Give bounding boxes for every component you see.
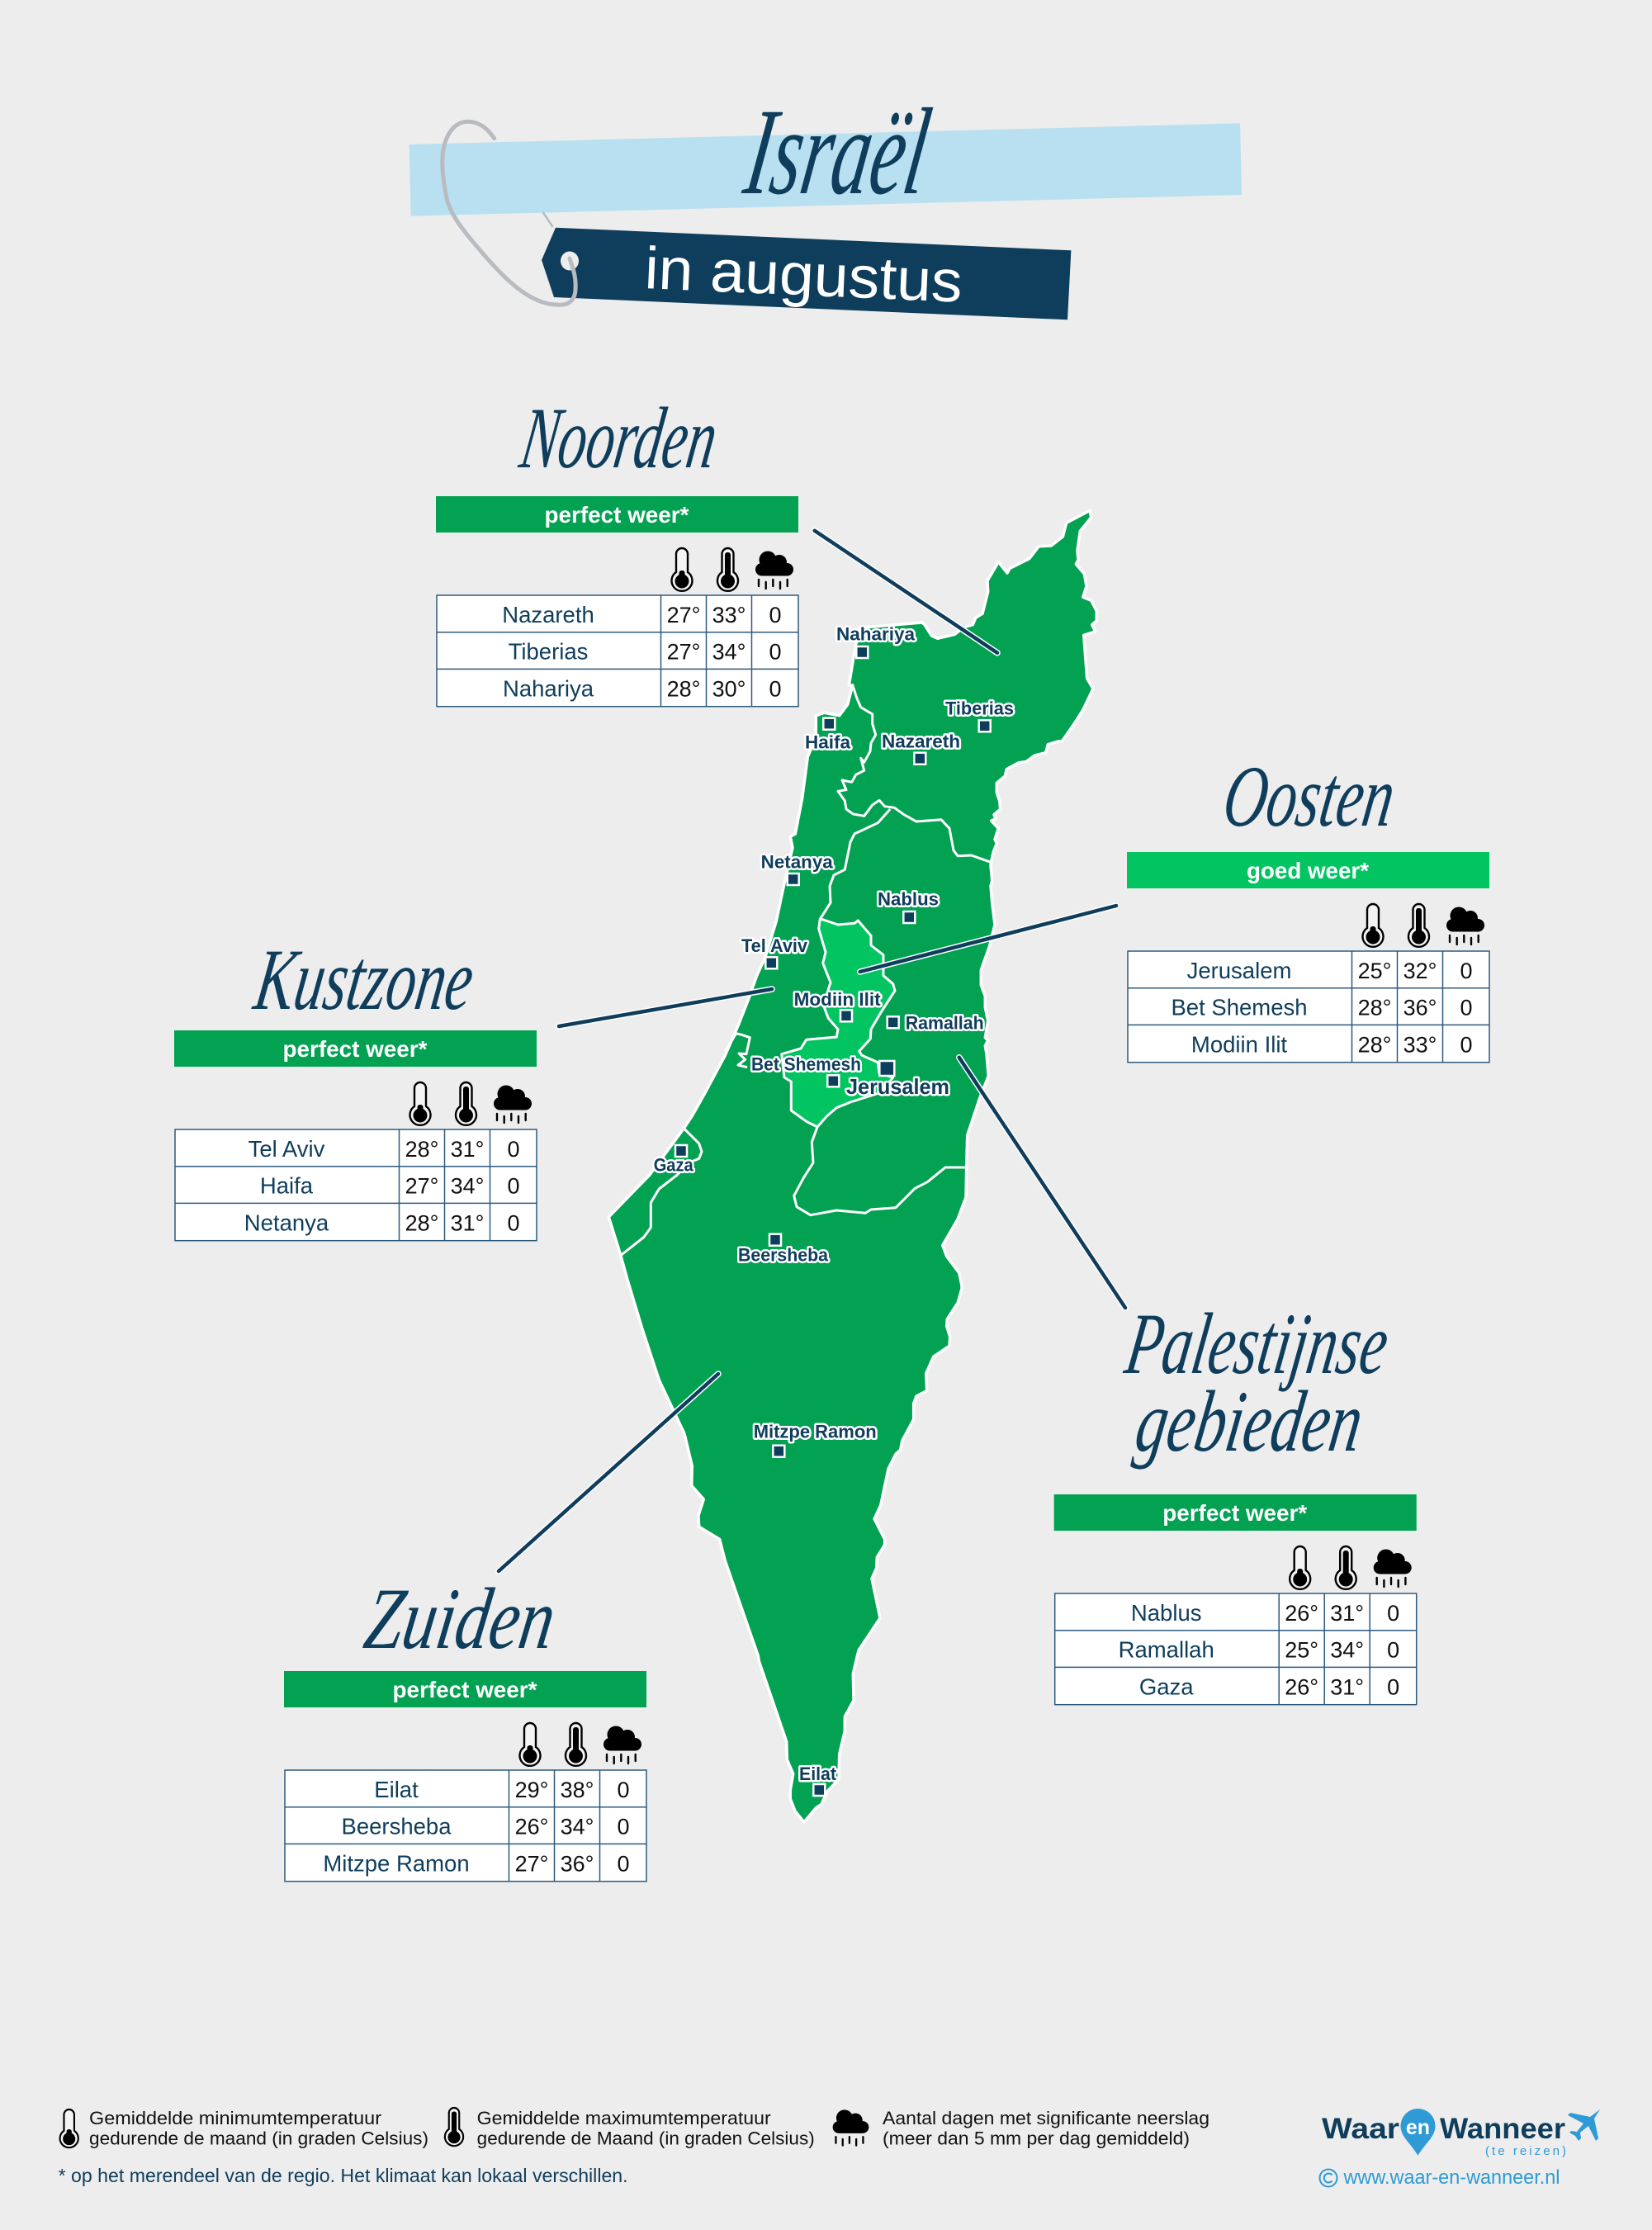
table rows: 27° — [667, 603, 700, 627]
table rows: Ramallah — [1119, 1637, 1214, 1663]
legend: maximum temperature: Gemiddelde maximumtemperatuur — [477, 2108, 771, 2128]
rating text: perfect weer* — [282, 1036, 428, 1062]
city: Nazareth — [882, 731, 960, 765]
table rows: Jerusalem — [1187, 958, 1291, 983]
table rows: 0 — [507, 1174, 520, 1199]
rating text: perfect weer* — [545, 502, 689, 528]
city: Nablus — [878, 889, 939, 923]
table rows: 28° — [1358, 1032, 1391, 1057]
logo word: Waar: Waar — [1322, 2113, 1399, 2145]
panel: zuiden — [284, 1571, 646, 1882]
city: Mitzpe Ramon: Mitzpe Ramon — [754, 1422, 877, 1442]
city: Mitzpe Ramon — [754, 1422, 877, 1457]
icon: max temperature — [566, 1723, 586, 1766]
rating bar — [1127, 852, 1489, 888]
heading: Palestijnse: Palestijnse — [1119, 1296, 1395, 1393]
legend — [60, 2108, 1209, 2149]
logo: Waar en Wanneer — [1319, 2109, 1600, 2189]
panel: noorden — [436, 391, 798, 707]
city: Netanya — [761, 852, 833, 885]
table rows: 0 — [617, 1778, 630, 1802]
panel: palestijnse gebieden — [1054, 1296, 1417, 1705]
map of Israel — [608, 510, 1096, 1822]
table rows: Tiberias — [509, 639, 588, 665]
icon: min temperature — [1362, 904, 1384, 947]
legend: precipitation: (meer dan 5 mm per dag gemiddeld) — [883, 2128, 1190, 2149]
city: Jerusalem — [846, 1061, 949, 1099]
map outline — [608, 510, 1096, 1822]
table rows: 27° — [667, 640, 700, 665]
icon: rain — [494, 1085, 532, 1123]
callout line: palestijnse gebieden — [959, 1058, 1125, 1308]
legend: precipitation — [833, 2108, 1209, 2149]
table rows: 0 — [1460, 959, 1473, 983]
weather table: noorden — [436, 496, 798, 707]
weather table: kustzone — [174, 1030, 537, 1241]
table rows: Modiin Ilit — [1191, 1031, 1287, 1057]
table rows: 25° — [1358, 959, 1391, 983]
heading: Kustzone: Kustzone — [248, 932, 480, 1029]
table rows: 33° — [712, 603, 746, 627]
city: Eilat — [799, 1764, 837, 1796]
weather table: oosten — [1127, 852, 1489, 1063]
table rows — [1119, 1600, 1399, 1699]
table rows: Haifa — [260, 1173, 314, 1199]
table rows: 33° — [1403, 1032, 1437, 1057]
heading: Oosten: Oosten — [1217, 749, 1402, 845]
table rows: 26° — [1285, 1601, 1318, 1626]
legend: maximum temperature: gedurende de Maand (in graden Celsius) — [477, 2128, 815, 2149]
icon: rain — [604, 1726, 641, 1764]
heading: Noorden: Noorden — [514, 391, 724, 487]
icon: copyright — [1319, 2170, 1337, 2186]
city: Tiberias: Tiberias — [945, 698, 1014, 719]
table rows — [244, 1136, 520, 1235]
city: Nazareth: Nazareth — [882, 731, 960, 752]
icon: min temperature — [520, 1723, 540, 1766]
table rows: 32° — [1403, 959, 1437, 983]
table rows: 34° — [451, 1174, 484, 1199]
table grid — [1128, 951, 1489, 1063]
table grid — [1055, 1593, 1417, 1705]
legend: maximum temperature — [445, 2108, 815, 2149]
table rows: 0 — [1387, 1674, 1399, 1699]
legend: minimum temperature — [60, 2108, 428, 2149]
region borders — [621, 685, 991, 1256]
table grid — [285, 1770, 646, 1882]
heading: gebieden: gebieden — [1129, 1374, 1370, 1470]
table rows: 0 — [617, 1851, 630, 1876]
rating bar — [1054, 1494, 1417, 1531]
icon: max temperature — [717, 548, 738, 591]
weather table: zuiden — [284, 1671, 646, 1882]
table rows: 0 — [769, 640, 782, 665]
region: oosten highlight — [782, 919, 895, 1127]
rating text: goed weer* — [1247, 858, 1369, 883]
icon: min temperature — [672, 548, 692, 591]
table rows: 34° — [712, 640, 746, 665]
table rows: 31° — [451, 1137, 484, 1162]
table rows: 28° — [405, 1137, 438, 1162]
city: Nahariya: Nahariya — [836, 624, 916, 645]
table grid — [175, 1129, 537, 1241]
table rows — [323, 1777, 630, 1876]
city: Bet Shemesh — [751, 1054, 861, 1087]
city: Nablus: Nablus — [878, 889, 939, 910]
rating text: perfect weer* — [393, 1677, 537, 1702]
table rows: Bet Shemesh — [1171, 995, 1308, 1020]
table rows: 0 — [617, 1815, 630, 1839]
title: Israël: Israël — [736, 83, 939, 220]
city: Haifa — [805, 718, 851, 753]
table rows: Nablus — [1131, 1600, 1202, 1626]
table rows: 28° — [1358, 996, 1391, 1020]
tag hole — [561, 251, 579, 271]
title block — [409, 83, 1242, 320]
icon: max temperature — [456, 1082, 476, 1125]
table rows: Nahariya — [503, 675, 594, 701]
table rows: Beersheba — [341, 1814, 452, 1839]
table rows: 31° — [1330, 1601, 1364, 1626]
title band — [409, 123, 1242, 216]
icon: max temperature — [1408, 904, 1429, 947]
table rows — [502, 602, 782, 701]
footnote: * op het merendeel van de regio. Het klimaat kan lokaal verschillen. — [59, 2165, 628, 2186]
callout line: oosten — [860, 906, 1116, 972]
table rows: 34° — [561, 1815, 594, 1839]
table rows: 0 — [1460, 996, 1473, 1020]
table rows: 26° — [1285, 1674, 1318, 1699]
icon: rain — [1374, 1549, 1412, 1587]
weather table: palestijnse gebieden — [1054, 1494, 1417, 1705]
luggage tag — [542, 228, 1071, 320]
city: Beersheba: Beersheba — [738, 1244, 829, 1265]
city: Jerusalem: Jerusalem — [846, 1074, 949, 1099]
city: Modiin Ilit — [794, 989, 881, 1021]
table rows: 27° — [405, 1174, 438, 1199]
table rows: Nazareth — [502, 602, 594, 627]
table rows: 34° — [1330, 1638, 1364, 1663]
table rows: 0 — [769, 676, 782, 701]
table rows: 36° — [1403, 996, 1437, 1020]
website url: www.waar-en-wanneer.nl — [1343, 2166, 1560, 2189]
table rows: 0 — [1387, 1601, 1399, 1626]
table rows: Tel Aviv — [249, 1136, 325, 1162]
callout line: zuiden — [499, 1374, 718, 1571]
table rows: 31° — [1330, 1674, 1364, 1699]
city: Tel Aviv: Tel Aviv — [741, 935, 808, 956]
table rows — [1171, 958, 1473, 1057]
city: Bet Shemesh: Bet Shemesh — [751, 1054, 861, 1075]
callout line: kustzone — [559, 989, 772, 1026]
table rows: 0 — [507, 1210, 520, 1235]
table rows: Netanya — [244, 1210, 329, 1235]
rating bar — [436, 496, 798, 533]
table rows: 0 — [1460, 1032, 1473, 1057]
panel: oosten — [1127, 749, 1489, 1063]
tag string — [543, 212, 553, 227]
city: Nahariya — [836, 624, 916, 658]
tag ring — [443, 121, 575, 305]
logo word: Wanneer: Wanneer — [1440, 2113, 1565, 2145]
rating bar — [284, 1671, 646, 1707]
table rows: Eilat — [374, 1777, 419, 1802]
table rows: 27° — [515, 1851, 548, 1876]
table rows: 28° — [405, 1210, 438, 1235]
rating text: perfect weer* — [1162, 1500, 1307, 1526]
legend: minimum temperature: gedurende de maand (in graden Celsius) — [89, 2128, 428, 2149]
rating bar — [174, 1030, 537, 1067]
subtitle: in augustus: in augustus — [643, 235, 963, 315]
city: Eilat: Eilat — [799, 1764, 837, 1784]
city: Tel Aviv — [741, 935, 808, 968]
panel: kustzone — [174, 932, 537, 1241]
table rows: 38° — [561, 1778, 594, 1802]
icon: max temperature — [1336, 1546, 1356, 1589]
city: Gaza — [654, 1145, 693, 1175]
icon: min temperature — [409, 1082, 431, 1125]
city: Gaza: Gaza — [654, 1154, 693, 1175]
heading: Zuiden: Zuiden — [358, 1571, 562, 1668]
city: Beersheba — [738, 1234, 829, 1265]
table rows: Mitzpe Ramon — [323, 1850, 470, 1876]
icon: rain — [1446, 907, 1484, 945]
city: Netanya: Netanya — [761, 852, 833, 873]
logo tagline: (te reizen) — [1485, 2144, 1566, 2158]
table rows: 29° — [515, 1778, 548, 1802]
icon: location pin — [1400, 2109, 1435, 2156]
icon: plane — [1568, 2109, 1600, 2141]
table rows: 0 — [1387, 1638, 1399, 1663]
table grid — [437, 595, 798, 707]
city: Ramallah: Ramallah — [906, 1013, 984, 1034]
legend: minimum temperature: Gemiddelde minimumtemperatuur — [89, 2108, 381, 2128]
icon: min temperature — [1290, 1546, 1310, 1589]
cities on top of callouts — [751, 989, 949, 1099]
table rows: 28° — [667, 676, 700, 701]
table rows: 36° — [561, 1851, 594, 1876]
city: Modiin Ilit: Modiin Ilit — [794, 989, 881, 1010]
table rows: Gaza — [1139, 1674, 1194, 1699]
table rows: 0 — [769, 603, 782, 627]
icon: rain — [755, 552, 793, 589]
table rows: 26° — [515, 1815, 548, 1839]
table rows: 30° — [712, 676, 746, 701]
legend: precipitation: Aantal dagen met significante neerslag — [883, 2108, 1209, 2128]
logo word: en: en — [1406, 2116, 1430, 2139]
table rows: 0 — [507, 1137, 520, 1162]
table rows: 31° — [451, 1210, 484, 1235]
callout line: noorden — [815, 531, 997, 653]
table rows: 25° — [1285, 1638, 1318, 1663]
city: Haifa: Haifa — [805, 732, 851, 753]
city: Tiberias — [945, 698, 1014, 731]
